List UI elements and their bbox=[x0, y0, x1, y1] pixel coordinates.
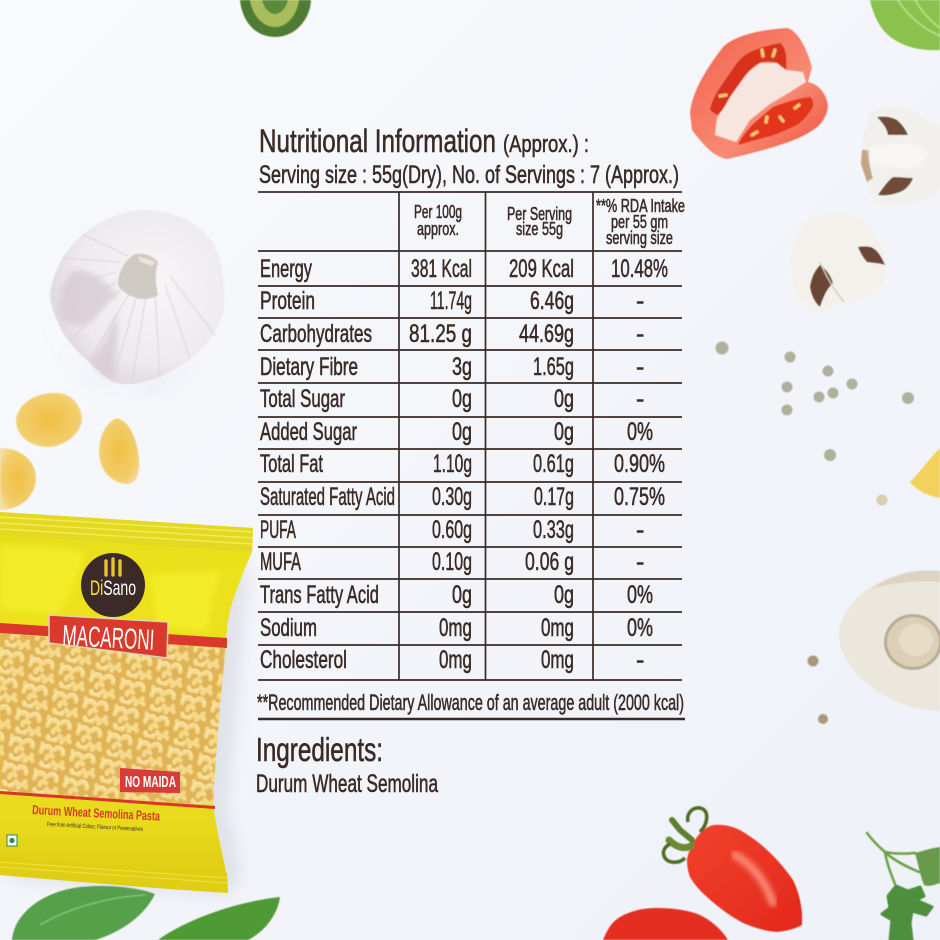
table rows: 381 Kcal bbox=[411, 255, 472, 283]
icon: tomato bottom bbox=[603, 908, 728, 940]
column headers bbox=[414, 196, 685, 248]
table rows: 1.65g bbox=[533, 353, 574, 381]
column headers: size 55g bbox=[516, 219, 563, 239]
table rows: Sodium bbox=[260, 614, 317, 642]
table rows: 0.75% bbox=[614, 483, 665, 511]
peppercorns bbox=[716, 342, 914, 724]
icon: pasta piece right edge bbox=[910, 448, 940, 498]
column headers: Per 100g bbox=[414, 202, 462, 222]
table rows: 6.46g bbox=[530, 287, 574, 315]
package shadow bbox=[10, 526, 248, 896]
ingredients heading: Ingredients: bbox=[256, 731, 383, 768]
table rows: 0mg bbox=[541, 614, 574, 642]
table rows: 44.69g bbox=[519, 320, 574, 348]
table rows: - bbox=[636, 320, 644, 348]
table rows: 81.25 g bbox=[409, 320, 472, 348]
red strip lower bbox=[0, 791, 215, 809]
macaroni label: MACARONI bbox=[62, 620, 155, 657]
table rows: - bbox=[636, 548, 644, 576]
table rows: 0g bbox=[554, 581, 574, 609]
table rows: 0.10g bbox=[432, 548, 472, 576]
table rows: 0g bbox=[452, 581, 472, 609]
table rules bbox=[258, 192, 685, 719]
table rows: 0.33g bbox=[533, 516, 574, 544]
macaroni label bbox=[49, 615, 168, 658]
table rows: 0mg bbox=[439, 614, 472, 642]
table rows: 0.06 g bbox=[525, 548, 574, 576]
macaroni window bbox=[0, 633, 226, 805]
title suffix: (Approx.) : bbox=[503, 131, 589, 158]
table rows: Added Sugar bbox=[260, 418, 357, 446]
table rows: 11.74g bbox=[430, 287, 472, 315]
table rows: Trans Fatty Acid bbox=[260, 581, 379, 609]
icon: green tomato top bbox=[240, 0, 311, 37]
title: Nutritional Information bbox=[259, 123, 496, 159]
icon: whole mushroom right bbox=[839, 570, 940, 711]
red strip upper bbox=[0, 623, 227, 648]
serving size line: Serving size : 55g(Dry), No. of Servings : 7 (Approx.) bbox=[259, 161, 679, 189]
table rows: - bbox=[636, 287, 644, 315]
icon: parsley bbox=[867, 833, 940, 940]
table rows: 0.17g bbox=[534, 483, 574, 511]
column headers: Per Serving bbox=[507, 204, 572, 224]
table rows: 3g bbox=[452, 353, 472, 381]
table rows: Saturated Fatty Acid bbox=[260, 483, 395, 511]
no maida badge: NO MAIDA bbox=[125, 774, 176, 791]
product package bbox=[0, 512, 253, 896]
table rows: 0g bbox=[554, 385, 574, 413]
table rows: 0g bbox=[554, 418, 574, 446]
column headers: per 55 gm bbox=[611, 212, 668, 232]
table rows: MUFA bbox=[260, 548, 301, 576]
table rows: - bbox=[636, 353, 644, 381]
nutrition table bbox=[258, 192, 685, 719]
icon: mushroom half middle bbox=[790, 212, 888, 312]
table rows: 1.10g bbox=[433, 450, 472, 478]
table rows: 0.90% bbox=[614, 450, 665, 478]
icon: garlic bbox=[50, 210, 224, 392]
veg mark bbox=[7, 835, 17, 846]
table rows: 0g bbox=[452, 418, 472, 446]
logo badge: DiSano bbox=[90, 577, 136, 600]
icon: plum tomato bbox=[663, 808, 802, 932]
table rows: Carbohydrates bbox=[260, 320, 372, 348]
table rows: - bbox=[636, 385, 644, 413]
logo badge bbox=[81, 553, 145, 617]
column headers: serving size bbox=[606, 228, 673, 248]
icon: mushroom half top right bbox=[861, 107, 940, 207]
table rows: - bbox=[636, 516, 644, 544]
package body bbox=[0, 512, 253, 893]
icon: basil leaves bottom bbox=[12, 886, 280, 940]
table rows: 0mg bbox=[439, 646, 472, 674]
icon: tomato slice bbox=[690, 28, 828, 159]
column headers: approx. bbox=[417, 219, 459, 239]
icons: pasta pieces left bbox=[0, 393, 139, 510]
table rows: 0% bbox=[627, 418, 653, 446]
pack highlight bbox=[0, 545, 220, 631]
icon: basil leaf top right bbox=[870, 0, 940, 50]
table rows: Energy bbox=[260, 255, 312, 283]
table rows: 0% bbox=[627, 614, 653, 642]
table rows: Protein bbox=[260, 287, 315, 315]
package tagline: Durum Wheat Semolina Pasta bbox=[32, 802, 161, 824]
table rows: Dietary Fibre bbox=[260, 353, 358, 381]
table rows: 0mg bbox=[541, 646, 574, 674]
footnote: **Recommended Dietary Allowance of an average adult (2000 kcal) bbox=[257, 690, 684, 715]
table rows: Total Fat bbox=[260, 450, 323, 478]
table rows: 0% bbox=[627, 581, 653, 609]
package small print: Free from Artificial Colour, Flavour or Preservatives bbox=[47, 822, 143, 833]
ingredients text: Durum Wheat Semolina bbox=[256, 770, 438, 798]
table rows: Total Sugar bbox=[260, 385, 345, 413]
table rows: 0.30g bbox=[432, 483, 472, 511]
column headers: **% RDA Intake bbox=[596, 196, 685, 216]
table rows: 0.61g bbox=[533, 450, 574, 478]
top seal bbox=[0, 512, 253, 552]
table rows bbox=[260, 255, 668, 674]
table rows: 10.48% bbox=[611, 255, 668, 283]
table rows: 209 Kcal bbox=[509, 255, 574, 283]
table rows: 0g bbox=[452, 385, 472, 413]
no maida badge bbox=[120, 768, 180, 793]
lower seal bbox=[0, 857, 228, 893]
table rows: 0.60g bbox=[432, 516, 472, 544]
table rows: PUFA bbox=[260, 516, 296, 544]
table rows: - bbox=[636, 646, 644, 674]
table rows: Cholesterol bbox=[260, 646, 347, 674]
